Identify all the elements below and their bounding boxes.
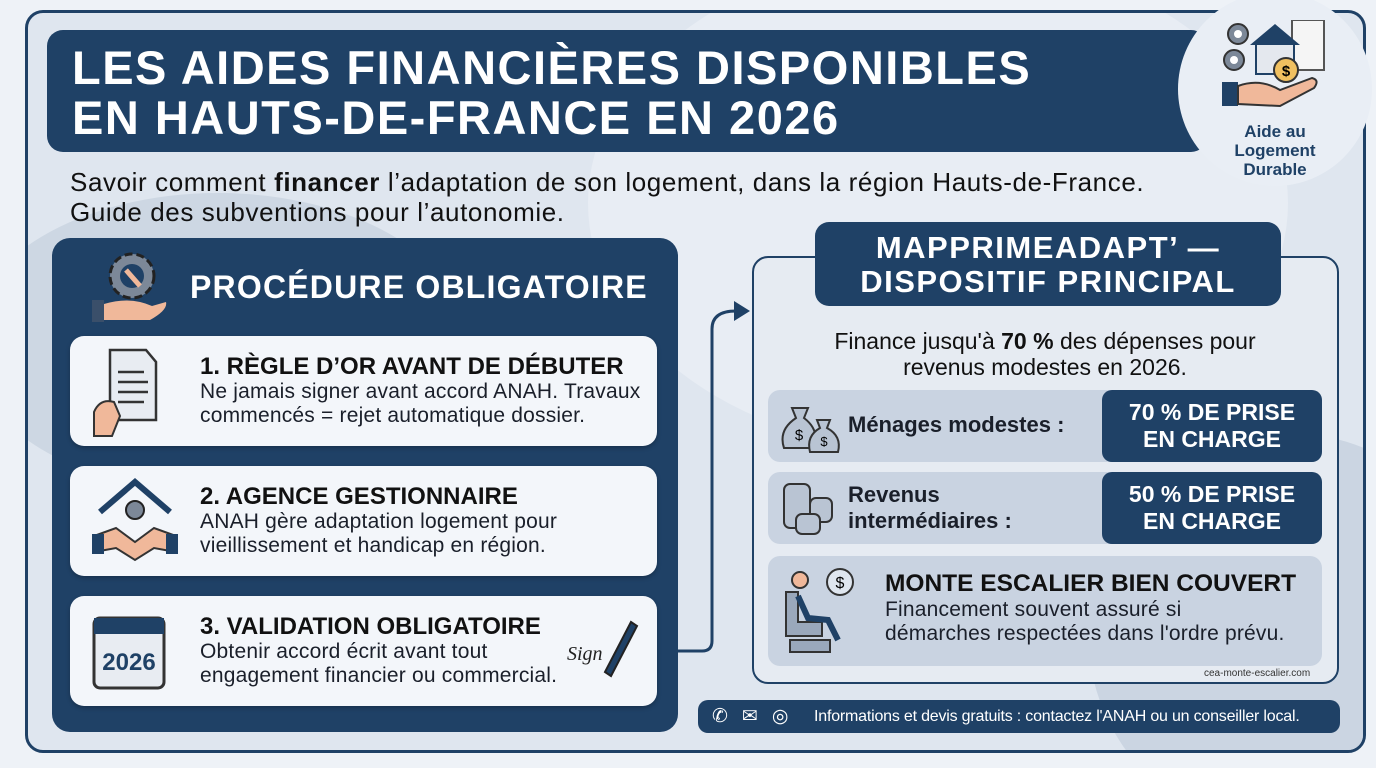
footer bar [698,700,1340,733]
footer bar: Informations et devis gratuits : contactez l'ANAH ou un conseiller local. [814,708,1300,725]
icon: pen signature: Sign [567,643,603,665]
subtitle [70,167,1144,227]
badge: Aide au Logement Durable: Aide au [1244,122,1306,141]
card 2: 2. AGENCE GESTIONNAIRE [200,483,518,510]
header: MaPrimeAdapt': DISPOSITIF PRINCIPAL [860,264,1236,299]
row: revenus intermédiaires: intermédiaires : [848,508,1012,533]
icon: money bags: $ [820,434,828,449]
icon: pen signature [567,620,638,678]
icon: coins [783,483,833,535]
source: cea-monte-escalier.com [1204,668,1310,679]
card 1: Ne jamais signer avant accord ANAH. Travaux [200,380,640,403]
header: MaPrimeAdapt': MAPPRIMEADAPT’ — [876,230,1220,265]
badge: Aide au Logement Durable [1178,0,1372,186]
icons: contact: ✆✉◎ [712,706,802,727]
badge: Aide au Logement Durable: Logement [1234,141,1316,160]
row: ménages modestes: 70 % DE PRISE [1129,399,1295,425]
title: EN HAUTS-DE-FRANCE EN 2026 [72,91,840,144]
card 3: engagement financier ou commercial. [200,664,557,687]
arrow [678,301,750,652]
row: revenus intermédiaires: 50 % DE PRISE [1129,481,1295,507]
row: ménages modestes [768,390,1322,462]
card 1: 1. RÈGLE D’OR AVANT DE DÉBUTER [200,353,624,380]
row: revenus intermédiaires: Revenus [848,482,940,507]
panel: procédure obligatoire [52,238,678,732]
card 1 [70,336,657,446]
subtitle: Guide des subventions pour l’autonomie. [70,197,565,227]
card 3: 3. VALIDATION OBLIGATOIRE [200,613,541,640]
row: revenus intermédiaires [768,472,1322,544]
icon: document [93,348,158,437]
row: monte escalier [768,556,1322,666]
icon: stairlift: $ [836,575,845,592]
panel: MaPrimeAdapt' [752,256,1339,684]
card 2: vieillissement et handicap en région. [200,534,546,557]
badge: Aide au Logement Durable: $ [1282,63,1291,80]
badge: Aide au Logement Durable: Durable [1243,160,1307,179]
card 3 [70,596,657,706]
row: monte escalier: MONTE ESCALIER BIEN COUVERT [885,570,1296,597]
title [47,30,1207,152]
title: LES AIDES FINANCIÈRES DISPONIBLES [72,41,1031,94]
heading: PROCÉDURE OBLIGATOIRE [190,269,648,305]
row: monte escalier: démarches respectées dans l'ordre prévu. [885,622,1285,645]
icon: calendar 2026: 2026 [102,649,156,676]
row: ménages modestes: Ménages modestes : [848,412,1064,437]
row: revenus intermédiaires: EN CHARGE [1143,508,1281,534]
subtitle: Savoir comment financer l’adaptation de son logement, dans la région Hauts-de-France. [70,167,1144,197]
text: finance: Finance jusqu'à 70 % des dépenses pour [834,328,1256,354]
icon: stairlift [785,568,854,653]
text: finance [834,328,1256,380]
icon: gear hand [92,252,166,322]
card 2: ANAH gère adaptation logement pour [200,510,557,533]
card 2 [70,466,657,576]
row: ménages modestes: EN CHARGE [1143,426,1281,452]
icon: money bags: $ [795,427,804,444]
card 3: Obtenir accord écrit avant tout [200,640,488,663]
header: MaPrimeAdapt' [815,222,1281,306]
text: finance: revenus modestes en 2026. [903,354,1187,380]
icon: calendar 2026 [92,616,166,690]
icon: house handshake [92,478,178,562]
icon: money bags [782,407,840,453]
card 1: commencés = rejet automatique dossier. [200,404,585,427]
row: monte escalier: Financement souvent assuré si [885,598,1181,621]
